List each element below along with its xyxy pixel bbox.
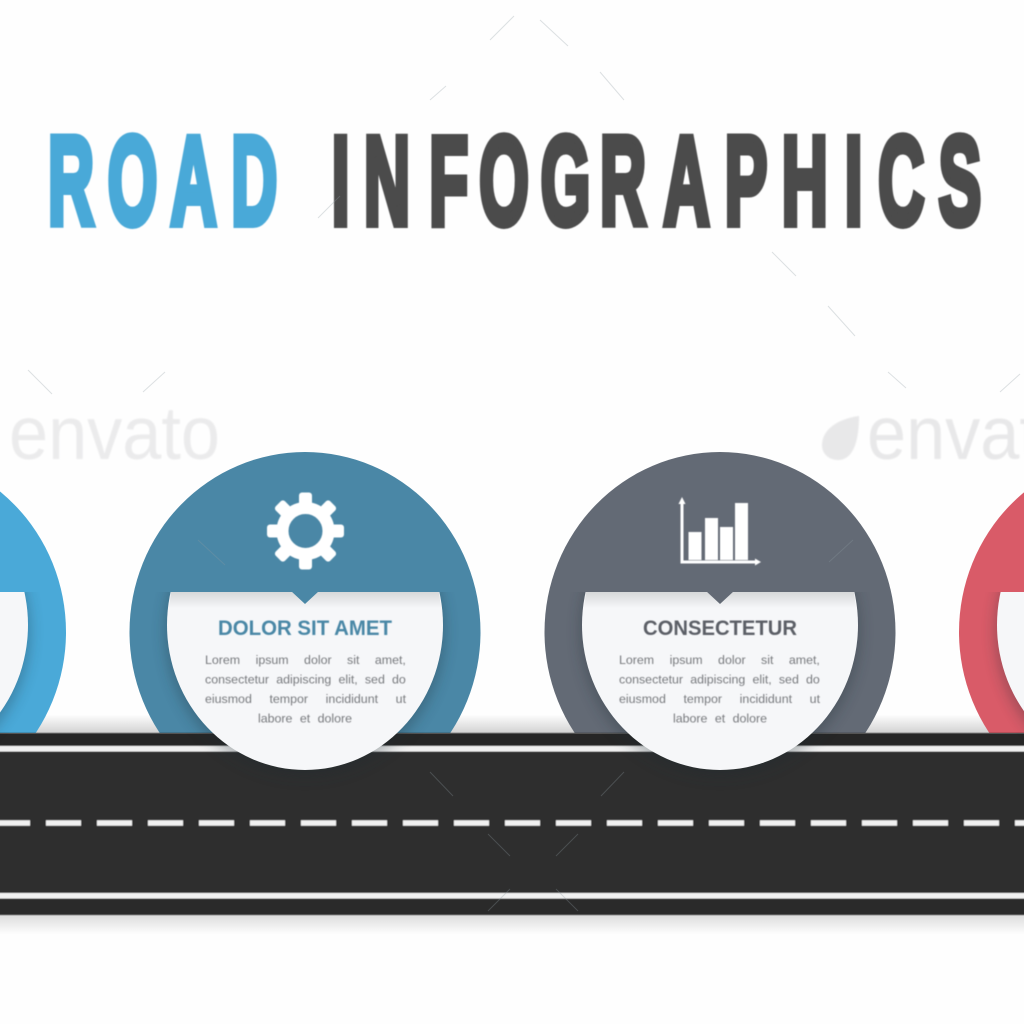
panel: grey circle [544, 452, 896, 733]
body text: labore et dolore [673, 712, 767, 726]
heading: CONSECTETUR [643, 617, 797, 640]
icon: gear [267, 492, 344, 570]
card shadows [0, 592, 1024, 752]
card: red [997, 592, 1024, 712]
pointer [706, 591, 734, 604]
body text [619, 653, 821, 726]
watermark: left envato: envato [9, 391, 220, 475]
body text: eiusmod tempor incididunt ut [205, 692, 407, 706]
card: blue [0, 592, 28, 712]
body text: consectetur adipiscing elit, sed do [205, 672, 406, 686]
heading: DOLOR SIT AMET [218, 617, 392, 640]
body text: Lorem ipsum dolor sit amet, [205, 653, 406, 667]
card: teal [167, 592, 443, 770]
road bottom edge line [0, 893, 1024, 898]
body text [205, 653, 407, 726]
road top edge line [0, 746, 1024, 752]
road centre dashes [0, 820, 1024, 826]
panel: blue circle [0, 492, 66, 733]
pointer [291, 591, 319, 604]
body text: Lorem ipsum dolor sit amet, [619, 653, 820, 667]
body text: labore et dolore [258, 712, 352, 726]
title [48, 112, 981, 252]
icon: bar chart [678, 497, 761, 566]
road shadow top [0, 714, 1024, 733]
title word: INFOGRAPHICS: INFOGRAPHICS [332, 112, 981, 252]
card body [167, 592, 443, 770]
card: grey [582, 592, 858, 770]
panel: red circle [959, 492, 1024, 733]
card body [582, 592, 858, 770]
body text: eiusmod tempor incididunt ut [619, 692, 821, 706]
card fold shading [584, 592, 856, 608]
card fold shading [169, 592, 441, 608]
title word: ROAD: ROAD [48, 112, 277, 252]
road [0, 733, 1024, 915]
body text: consectetur adipiscing elit, sed do [619, 672, 820, 686]
panel: teal circle [130, 452, 480, 733]
road shadow bottom [0, 915, 1024, 935]
